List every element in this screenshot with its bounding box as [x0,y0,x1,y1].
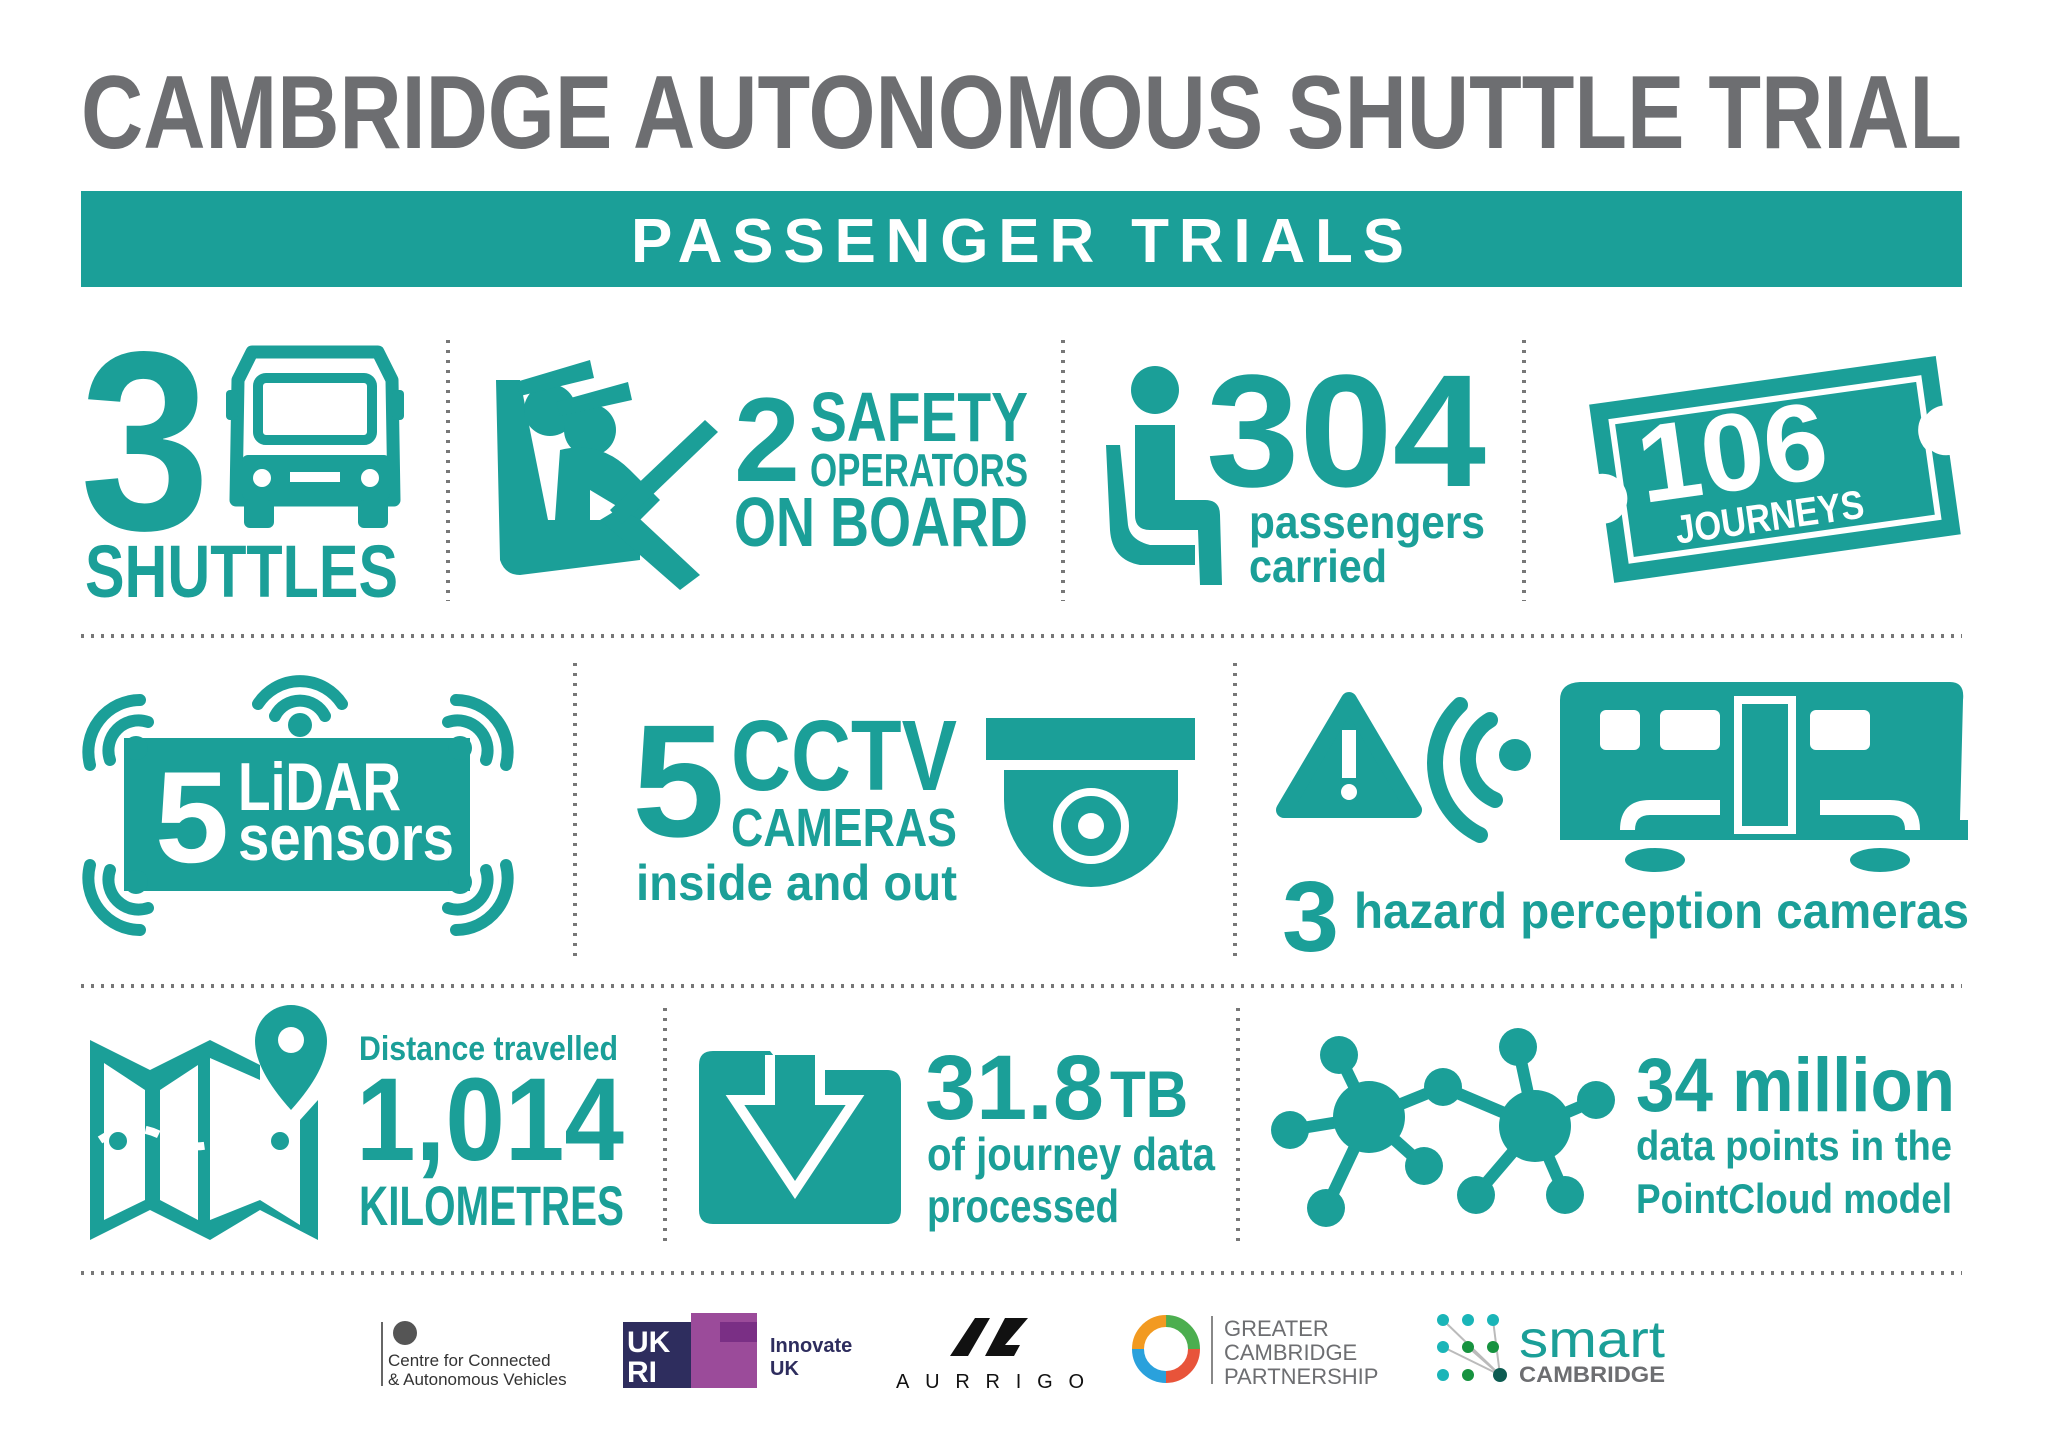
stat: 106 journeys ticket: JOURNEYS [1672,483,1867,553]
logo: Aurrigo [896,1318,1084,1393]
stat: 106 journeys ticket [1589,356,1961,583]
logo: smart cambridge: smart [1519,1311,1666,1369]
stat: 1,014 kilometres: 1,014 [356,1054,624,1186]
stat: 5 lidar sensors: 5 [155,744,229,890]
icon: dome camera [986,718,1195,887]
logo: Greater Cambridge Partnership: PARTNERSHIP [1224,1364,1378,1389]
logo: Greater Cambridge Partnership: GREATER [1224,1316,1329,1341]
icon: map with pin [90,1005,327,1240]
banner: passenger trials [81,191,1962,287]
stat: 31.8 TB: 31.8 [925,1037,1104,1139]
stat: 304 passengers: 304 [1206,341,1486,520]
stat: 31.8 TB: TB [1110,1057,1188,1131]
logo: UKRI Innovate UK: Innovate [770,1335,852,1357]
stat: 5 cctv cameras: 5 [632,691,725,870]
icon: sensor waves [88,681,508,930]
stat: 3 shuttles: 3 [80,299,210,584]
logo: smart cambridge: CAMBRIDGE [1519,1362,1665,1387]
stat: 2 safety operators: ON BOARD [734,483,1028,561]
stat: 3 hazard perception cameras: 3 [1282,861,1339,973]
stat: 3 shuttles [80,299,404,613]
stat: 34 million data points [1271,1028,1955,1227]
stat: 34 million data points: data points in the [1636,1122,1952,1169]
logo: UKRI Innovate UK: UK [627,1326,671,1359]
stat: 5 cctv cameras [632,691,1195,911]
stat: 2 safety operators: OPERATORS [810,444,1028,496]
stat: 304 passengers: passengers [1249,496,1485,548]
stat: 5 lidar sensors [88,681,508,930]
stat: 5 cctv cameras: inside and out [636,855,957,911]
logo: Greater Cambridge Partnership [1138,1316,1378,1389]
stat: 34 million data points: PointCloud model [1636,1175,1952,1222]
logo: UKRI Innovate UK: UK [770,1358,799,1380]
icon: shuttle side [1560,682,1968,872]
stat: 5 cctv cameras: CCTV [731,700,957,812]
icon: seated passenger [1106,366,1222,585]
stat: 3 hazard perception cameras [1282,682,1969,973]
logo: CCAV: & Autonomous Vehicles [388,1370,567,1389]
stat: 304 passengers [1106,341,1486,592]
stat: 106 journeys ticket: 106 [1630,379,1835,527]
logo: smart cambridge [1437,1311,1666,1387]
logo: CCAV [382,1321,567,1389]
stat: 2 safety operators [496,360,1028,590]
stat: 304 passengers: carried [1249,540,1387,592]
stat: 31.8 TB: processed [927,1180,1119,1232]
stat: 1,014 kilometres: Distance travelled [359,1030,618,1068]
banner: passenger trials: PASSENGER TRIALS [631,207,1404,276]
stat: 1,014 kilometres: KILOMETRES [359,1174,624,1237]
icon: download folder [699,1051,901,1224]
stat: 2 safety operators: 2 [734,373,800,507]
logo: UKRI Innovate UK: RI [627,1356,657,1389]
stat: 1,014 kilometres [90,1005,624,1240]
stat: 2 safety operators: SAFETY [810,378,1028,456]
logo: UKRI Innovate UK [623,1313,852,1389]
logo: Aurrigo: AURRIGO [896,1371,1084,1393]
stat: 5 lidar sensors: sensors [238,802,454,874]
stat: 34 million data points: 34 million [1636,1043,1955,1128]
stat: 3 hazard perception cameras: hazard perception cameras [1354,883,1969,939]
icon: network [1271,1028,1615,1227]
stat: 5 cctv cameras: CAMERAS [731,798,957,858]
stat: 31.8 TB: of journey data [927,1128,1215,1180]
stat: 3 shuttles: SHUTTLES [85,530,398,613]
icon: safety operators [496,360,718,590]
icon: warning [1284,700,1414,810]
icon: bus front [226,352,404,528]
stat: 5 lidar sensors: LiDAR [238,749,401,825]
icon: signal waves [1435,705,1531,835]
stat: 31.8 TB [699,1037,1215,1232]
logo: CCAV: Centre for Connected [388,1351,551,1370]
logo: Greater Cambridge Partnership: CAMBRIDGE [1224,1340,1357,1365]
